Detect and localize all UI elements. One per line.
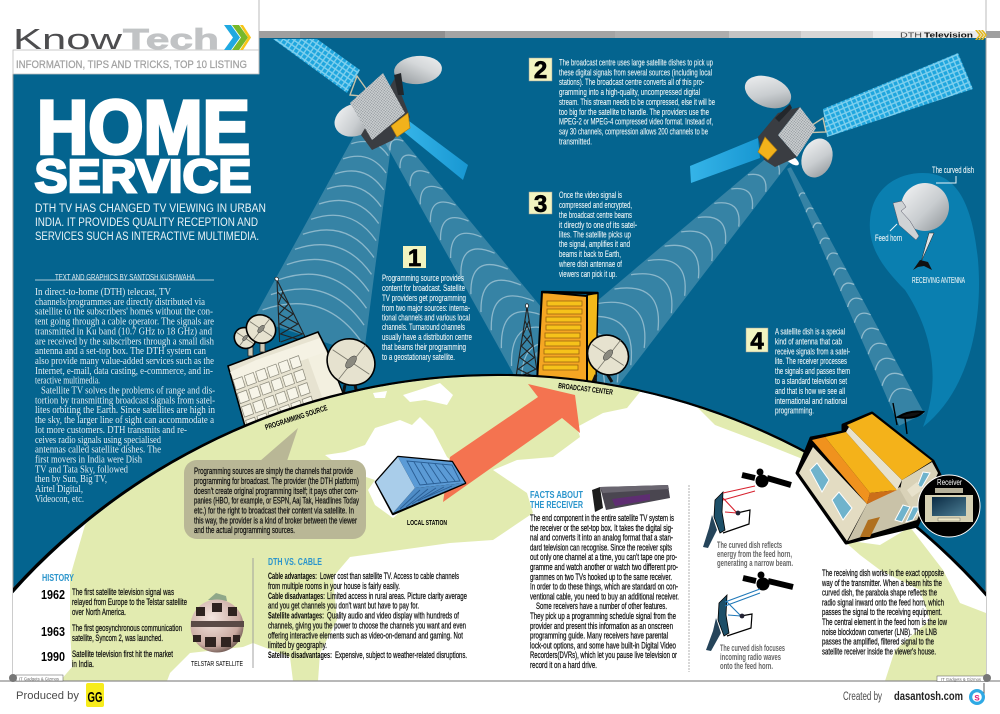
step 4: and that is how we see all: [775, 386, 845, 397]
local station container: LOCAL STATION: [407, 518, 447, 527]
dth vs cable: Cable disadvantages:: [268, 591, 325, 602]
label: programming source: PROGRAMMING SOURCE: [264, 403, 328, 432]
history: in India.: [72, 659, 94, 670]
subtitle: INDIA. IT PROVIDES QUALITY RECEPTION AND: [35, 217, 258, 229]
diagram: curved dish reflecting: energy from the feed horn,: [717, 549, 792, 559]
step 3: 3: [534, 191, 547, 218]
step 1: that beams their programming: [382, 342, 466, 353]
step 4: receive signals from a satel-: [775, 346, 850, 357]
title: [34, 86, 251, 202]
callout: programming sources: [184, 428, 366, 539]
intro body text: also provide many value-added services such as the: [35, 356, 214, 367]
callout: programming sources: etc.) for the right to broadcast their content via satellite. In: [194, 506, 354, 516]
step 1: Programming source provides: [382, 273, 464, 284]
history: 1990: [41, 650, 65, 664]
facts about the receiver: THE RECEIVER: [530, 499, 583, 511]
intro body text: In direct-to-home (DTH) telecast, TV: [35, 287, 171, 298]
intro body text: Satellite TV solves the problems of range and dis-: [41, 386, 215, 396]
dth vs cable: limited by geography.: [268, 640, 327, 651]
telstar satellite: TELSTAR SATELLITE: [191, 659, 243, 668]
facts about the receiver: nal and converts it into an analog format that a stan-: [530, 533, 673, 544]
header: know tech: [0, 0, 259, 74]
step 1: from two major sources: interna-: [382, 303, 470, 314]
footer: dasantosh.com: [894, 691, 963, 703]
step 3: where dish antennae of: [558, 259, 622, 270]
intro body text: are received by the subscribers through a small dish: [35, 336, 215, 347]
step 4: lite. The receiver processes: [775, 356, 847, 367]
step 4: to a standard television set: [775, 376, 847, 387]
receiver inset: [918, 475, 980, 537]
history: satellite, Syncom 2, was launched.: [72, 633, 163, 644]
callout: programming sources: panies (HBO, for example, or ESPN, Aaj Tak, Headlines Today: [194, 496, 359, 506]
header: know tech: Know: [13, 24, 124, 56]
signal beams: [256, 134, 924, 426]
diagram: curved dish focusing: onto the feed horn.: [720, 661, 773, 671]
intro body text: Airtel Digital,: [35, 484, 83, 495]
step 3: the signal, amplifies it and: [559, 239, 630, 250]
dth vs cable: Quality audio and video display with hundreds of: [327, 610, 459, 622]
facts about the receiver: out only one channel at a time, you can't tape one pro-: [530, 552, 677, 563]
intro body text: antennas called satellite dishes. The: [35, 445, 161, 456]
step 3: it directly to one of its satel-: [559, 220, 637, 231]
house: [797, 413, 940, 543]
step 2: 2: [534, 57, 547, 84]
dth vs cable: channels, giving you the power to choose the channels you want and even: [268, 620, 466, 631]
step 3: compressed and encrypted,: [559, 200, 632, 211]
step 1: content for broadcast. Satellite: [382, 283, 465, 294]
step 1: [382, 245, 472, 363]
intro body text: first movers in India were Dish: [35, 454, 143, 466]
dth vs cable: [268, 557, 467, 661]
receiving dish text: noise blockdown converter (LNB). The LNB: [822, 627, 937, 638]
step 1: TV providers get programming: [382, 293, 466, 304]
receiving dish text: [821, 568, 947, 657]
step 2: stream. This stream needs to be compressed, else it will be: [559, 97, 715, 108]
subtitle: [35, 203, 266, 243]
diagram: curved dish reflecting: generating a narrow beam.: [717, 558, 793, 568]
footer: Created by: [843, 691, 882, 703]
facts about the receiver: In order to do these things, which are standard on con-: [530, 582, 678, 593]
header: know tech: Tech: [123, 24, 219, 56]
step 2: transmitted.: [559, 136, 592, 147]
dth vs cable: Cable advantages:: [268, 571, 317, 582]
intro body text: channels/programmes are directly distributed via: [35, 297, 205, 308]
facts about the receiver: dard television can recognise. Since the receiver spits: [530, 542, 672, 553]
intro body text: antenna and a set-top box. The DTH system can: [35, 346, 207, 357]
step 1: 1: [408, 245, 421, 272]
step 2: gramming into a high-quality, uncompressed digital: [559, 87, 700, 98]
footer: Produced by: [16, 690, 80, 702]
subtitle: DTH TV HAS CHANGED TV VIEWING IN URBAN: [35, 203, 266, 215]
telstar satellite: [190, 593, 244, 668]
step 4: 4: [750, 328, 764, 355]
intro body text: tortion by transmitting broadcast signals from satel-: [35, 395, 215, 406]
step 1: to a geostationary satellite.: [382, 352, 455, 363]
dth vs cable: and you get channels you don't want but have to pay for.: [268, 601, 419, 612]
dth vs cable: Limited access in rural areas. Picture clarity average: [327, 591, 467, 602]
step 2: too big for the satellite to handle. The providers use the: [559, 107, 709, 118]
local station container: [376, 457, 465, 527]
receiving dish text: passes the amplified, filtered signal to the: [822, 637, 934, 648]
facts about the receiver: ventional cable, you need to buy an additional receiver.: [530, 591, 679, 602]
divider: [252, 558, 254, 668]
history: Satellite television first hit the market: [72, 649, 173, 660]
facts about the receiver: provider and present this information as an onscreen: [530, 621, 673, 632]
subtitle: SERVICES SUCH AS INTERACTIVE MULTIMEDIA.: [35, 231, 259, 243]
step 2: say 30 channels, compression allows 200 channels to be: [559, 126, 708, 138]
step 4: international and national: [775, 396, 847, 407]
step 2: The broadcast centre uses large satellite dishes to pick up: [559, 58, 713, 68]
receiving antenna illustration: The curved dish: [932, 165, 974, 176]
step 4: [746, 326, 850, 417]
diagram: curved dish reflecting: [703, 468, 793, 568]
callout: programming sources: this way, the provider is a kind of broker between the viewer: [194, 516, 357, 526]
broadcast center building: [516, 292, 636, 383]
receiving antenna illustration: Feed horn: [875, 233, 902, 244]
facts about the receiver: They pick up a programming schedule signal from the: [530, 611, 676, 622]
step 3: Once the video signal is: [559, 190, 622, 201]
history: The first satellite television signal was: [72, 587, 174, 598]
step 4: A satellite dish is a special: [775, 326, 845, 338]
facts about the receiver: gramme and watch another or watch two different pro-: [530, 562, 678, 573]
dth vs cable: Satellite advantages:: [268, 610, 324, 622]
step 3: [529, 190, 637, 280]
facts about the receiver: The end component in the entire satellite TV system is: [530, 513, 674, 524]
facts about the receiver: FACTS ABOUT: [530, 489, 583, 501]
header: know tech: INFORMATION, TIPS AND TRICKS, TOP 10 LISTING: [16, 59, 247, 71]
history: over North America.: [72, 607, 126, 618]
footer: IT Gadgets & Gizmos: [19, 676, 60, 682]
header: section bar: [259, 0, 1000, 40]
divider: [688, 485, 690, 672]
intro body text: lites orbiting the Earth. Since satellites are high in: [35, 405, 216, 416]
satellite right: [690, 53, 973, 183]
header: section bar: Television: [924, 32, 973, 40]
diagram: curved dish focusing: [706, 572, 793, 671]
footer: s: [974, 692, 980, 704]
footer: [0, 674, 1000, 714]
title: HOME: [37, 86, 250, 170]
icon: set-top box: [592, 485, 670, 512]
step 2: [529, 57, 715, 147]
receiving dish text: satellite receiver inside the viewer's house.: [822, 646, 936, 657]
intro body text: then by Sun, Big TV,: [35, 474, 107, 485]
history: 1963: [41, 625, 65, 639]
dth vs cable: Expensive, subject to weather-related disruptions.: [335, 650, 467, 661]
step 4: programming.: [775, 406, 814, 417]
house dish: [893, 403, 923, 434]
facts about the receiver: lock-out options, and some have built-in Digital Video: [530, 640, 676, 651]
dth vs cable: offering interactive elements such as video-on-demand and gaming. Not: [268, 630, 463, 641]
callout: programming sources: doesn't create original programming itself; it pays other com-: [194, 486, 358, 497]
receiving antenna illustration: [870, 165, 979, 427]
step 3: viewers can pick it up.: [559, 269, 617, 280]
red arrow: [443, 384, 580, 502]
intro body text: [35, 287, 216, 505]
receiving antenna illustration: RECEIVING ANTENNA: [912, 276, 965, 285]
facts about the receiver: record it on a hard drive.: [530, 660, 597, 671]
history: 1962: [41, 588, 65, 602]
diagram: curved dish focusing: incoming radio waves: [720, 652, 781, 662]
step 4: kind of antenna that cab: [775, 336, 842, 347]
facts about the receiver: grammes on two TVs hooked up to the same receiver.: [530, 572, 672, 583]
facts about the receiver: Recorders(DVRs), which let you pause live television or: [530, 650, 677, 661]
callout: programming sources: Programming sources are simply the channels that provide: [194, 466, 353, 477]
intro body text: Videocon, etc.: [35, 494, 84, 505]
footer: GG: [88, 689, 102, 706]
intro body text: tent going through a cable operator. The signals are: [35, 317, 214, 328]
intro body text: the sky, the larger line of sight can accommodate a: [35, 415, 214, 426]
earth: [13, 360, 986, 681]
intro body text: TV and Tata Sky, followed: [35, 464, 129, 475]
footer: IT Gadgets & Gizmos: [941, 677, 982, 682]
callout: programming sources: programming for broadcast. The provider (the DTH platform): [194, 476, 359, 487]
history: The first geosynchronous communication: [72, 623, 182, 634]
step 2: these digital signals from several sources (including local: [559, 67, 712, 78]
facts about the receiver: Some receivers have a number of other features.: [536, 601, 667, 612]
dth vs cable: Lower cost than satellite TV. Access to cable channels: [320, 571, 459, 582]
receiver inset: Receiver: [937, 478, 962, 487]
intro body text: Internet, e-mail, data casting, e-commerce, and in-: [35, 366, 213, 377]
satellite left: [273, 39, 468, 180]
callout: programming sources: and the actual programming sources.: [194, 525, 295, 536]
diagram: curved dish reflecting: The curved dish reflects: [717, 540, 782, 550]
facts about the receiver: the receiver or the set-top box. It takes the digital sig-: [530, 523, 673, 534]
step 3: the broadcast centre beams: [559, 210, 632, 221]
step 1: usually have a distribution centre: [382, 332, 472, 343]
step 3: lites. The satellite picks up: [559, 230, 631, 240]
dth vs cable: DTH VS. CABLE: [268, 557, 322, 568]
dth vs cable: from multiple rooms in your house is fairly easily.: [268, 581, 400, 592]
intro body text: satellite to the subscribers' homes without the con-: [35, 307, 213, 318]
step 2: stations). The broadcast centre converts all of this pro-: [559, 77, 704, 88]
intro body text: teractive multimedia.: [35, 376, 100, 387]
intro body text: ceives radio signals using specialised: [35, 435, 162, 446]
intro body text: transmitted in Ku band (10.7 GHz to 18 GHz) and: [35, 326, 213, 337]
step 1: tional channels and various local: [382, 312, 470, 324]
facts about the receiver: programming guide. Many receivers have parental: [530, 631, 668, 642]
history: relayed from Europe to the Telstar satellite: [72, 597, 187, 608]
title: SERVICE: [34, 150, 251, 202]
header: section bar: DTH: [900, 32, 922, 40]
dth vs cable: Satellite disadvantages:: [268, 650, 332, 661]
byline: TEXT AND GRAPHICS BY SANTOSH KUSHWAHA: [55, 273, 195, 282]
programming source building: [228, 277, 384, 431]
history: [41, 573, 187, 670]
intro body text: lot more customers. DTH transmits and re-: [35, 425, 187, 436]
step 1: channels. Turnaround channels: [382, 322, 465, 333]
step 3: beams it back to Earth,: [559, 249, 621, 260]
history: HISTORY: [42, 573, 74, 584]
step 4: the signals and passes them: [775, 366, 850, 377]
diagram: curved dish focusing: The curved dish focuses: [720, 643, 785, 653]
facts about the receiver: [530, 489, 679, 671]
label: broadcast center: BROADCAST CENTER: [558, 381, 614, 397]
step 2: MPEG-2 or MPEG-4 compressed video format. Instead of,: [559, 117, 713, 128]
